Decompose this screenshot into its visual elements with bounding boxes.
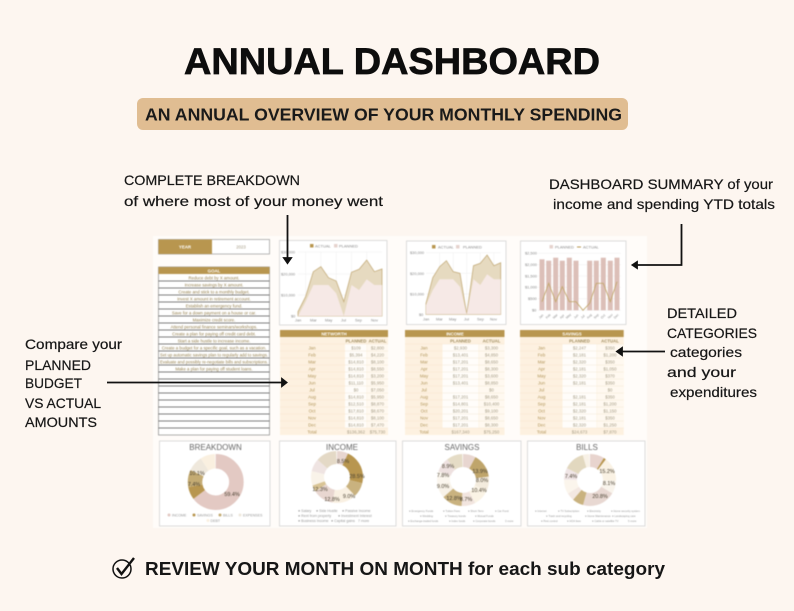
table: savings: Sep	[538, 402, 546, 406]
table: networth: $14,810	[348, 422, 364, 428]
chart: income area: $30,000	[410, 250, 425, 255]
table: income: Aug	[420, 394, 428, 400]
table: networth: $75,730	[370, 430, 386, 434]
table: savings: $2,320	[573, 360, 587, 364]
table: income: Dec	[420, 422, 429, 428]
donut: savings: ● Wedding	[420, 514, 433, 518]
table: savings: Mar	[538, 360, 546, 364]
annotation: dashboard summary: income and spending YTD totals	[553, 196, 775, 212]
table: income: $17,201	[453, 360, 469, 364]
table: income: PLANNED	[450, 339, 471, 344]
chart: net worth area: $30,000	[281, 250, 296, 254]
goal table: Create a budget for a specific goal, such as a vacation.	[162, 346, 266, 350]
donut: breakdown: EXPENSES	[243, 514, 263, 518]
table: income: $17,201	[453, 374, 469, 378]
year selector: YEAR	[179, 244, 192, 250]
table: savings: Jun	[538, 380, 546, 386]
annotation: detailed categories: expenditures	[670, 384, 757, 400]
table: networth: $11,110	[349, 380, 364, 386]
table: networth: $3,200	[371, 374, 385, 378]
donut: savings: 9.0%	[437, 484, 449, 490]
table: income: ACTUAL	[483, 339, 501, 344]
table: networth	[280, 330, 388, 435]
table: income: May	[420, 374, 429, 378]
donut: breakdown: 59.4%	[224, 492, 240, 498]
table: networth: $17,810	[348, 408, 364, 414]
donut: savings: 10.4%	[471, 488, 487, 494]
donut: bills: ● Electricity	[587, 509, 602, 513]
table: income: $75,250	[484, 430, 500, 434]
year selector	[158, 240, 270, 254]
chart: savings bars: ACTUAL	[583, 244, 600, 250]
annotation: compare planned vs actual	[25, 336, 122, 430]
table: savings: Jan	[538, 346, 546, 350]
table: networth: $136,362	[347, 430, 366, 434]
table: income: $8,300	[485, 366, 499, 372]
donut: income: 8.5%	[337, 459, 349, 465]
table: networth: NETWORTH	[321, 332, 347, 336]
table: savings: $370	[605, 374, 615, 378]
table: savings: $2,181	[573, 366, 587, 372]
donut: breakdown: DEBT	[210, 519, 221, 523]
chart: savings bars: $500	[528, 296, 537, 301]
table: savings: $1,250	[603, 422, 617, 428]
chart: income area	[406, 241, 506, 324]
arrow: to savings table	[617, 348, 665, 355]
chart: savings bars: PLANNED	[555, 244, 574, 250]
table: savings: $2,181	[573, 394, 587, 400]
table: savings	[520, 330, 624, 435]
footer statement: REVIEW YOUR MONTH ON MONTH for each sub category	[145, 559, 665, 579]
arrow: to planned table	[107, 379, 286, 386]
table: networth: $7,050	[371, 388, 385, 392]
donut: bills: 5 more	[628, 519, 637, 523]
table: savings: $24,673	[572, 430, 588, 434]
chart: savings bars: Jun	[573, 313, 580, 320]
table: savings: $2,181	[573, 352, 587, 358]
chart: income area: Jul	[464, 316, 469, 322]
subtitle banner: AN ANNUAL OVERVIEW OF YOUR MONTHLY SPENDING	[145, 104, 622, 124]
annotation: detailed categories: DETAILED	[667, 305, 737, 321]
chart: net worth area: $20,000	[281, 272, 296, 276]
year selector: 2023	[236, 244, 246, 250]
table: savings: $2,181	[573, 402, 587, 406]
annotation: compare planned vs actual: BUDGET	[25, 375, 82, 391]
table: income: Total	[419, 430, 429, 434]
table: networth: ACTUAL	[369, 339, 387, 344]
table: savings: $1,150	[603, 408, 617, 414]
donut: bills: ● TV Subscription	[558, 509, 580, 513]
goal table: Make a plan for paying off student loans.	[175, 366, 253, 372]
donut: savings: 8.0%	[476, 478, 488, 484]
donut: income: 12.3%	[312, 487, 328, 493]
goal table: GOAL	[208, 268, 221, 274]
donut: bills: ● Home Maintenance	[585, 514, 611, 518]
annotation: compare planned vs actual: Compare your	[25, 336, 122, 352]
chart: savings bars: Nov	[607, 313, 614, 320]
table: income: $9,100	[485, 408, 499, 414]
chart: savings bars: Sep	[593, 313, 600, 320]
table: income: $4,850	[485, 352, 499, 358]
icon: check circle	[113, 558, 134, 578]
chart: net worth area: Jan	[295, 318, 301, 322]
donut: bills: ● HOA fees	[567, 519, 582, 523]
chart: income area: $20,000	[410, 271, 425, 276]
donut: bills: ● Home security system	[611, 509, 641, 513]
table: income: Apr	[421, 366, 428, 372]
table: savings: $2,320	[573, 408, 587, 414]
annotation: detailed categories	[667, 305, 757, 400]
donut: bills: BILLS	[576, 443, 598, 452]
table: networth: $8,550	[371, 366, 385, 372]
table: savings: $7,870	[603, 430, 617, 434]
arrow: to area chart	[284, 215, 291, 263]
table: income: Oct	[421, 408, 428, 414]
table: networth: Feb	[308, 352, 316, 358]
donut: income: ● Rent from property	[298, 514, 331, 518]
table: networth: Jan	[308, 346, 316, 350]
table: income: $8,300	[485, 422, 499, 428]
chart: net worth area: Mar	[310, 318, 317, 322]
chart: savings bars: Dec	[613, 313, 620, 320]
chart: savings bars: Oct	[600, 313, 606, 320]
goal table: Reduce debt by X amount.	[189, 276, 239, 280]
annotation: detailed categories: categories	[670, 344, 742, 360]
chart: income area: Sep	[477, 316, 484, 322]
table: income: $13,401	[453, 380, 469, 386]
donut: income: 28.5%	[349, 474, 365, 480]
annotation: complete breakdown: COMPLETE BREAKDOWN	[124, 172, 300, 188]
donut: bills: 7.4%	[565, 474, 577, 480]
table: income: Mar	[420, 360, 428, 364]
chart: savings bars: Mar	[552, 312, 559, 320]
table: savings: May	[537, 374, 546, 378]
chart: savings bars	[520, 241, 626, 324]
table: income: $20,201	[453, 408, 469, 414]
donut: savings: ● Treasury bonds	[445, 514, 467, 518]
chart: net worth area: Sep	[355, 318, 362, 322]
chart: income area: Jan	[423, 316, 429, 322]
table: income: Jun	[420, 380, 428, 386]
table: income: $167,340	[452, 430, 470, 434]
donut: bills: ● Internet	[535, 509, 547, 513]
donut: income: ● Investment Interest	[338, 514, 372, 518]
table: income: $3,600	[485, 374, 499, 378]
chart: income area: ACTUAL	[438, 244, 455, 250]
goal table: Increase savings by X amount.	[185, 282, 243, 288]
donut: savings: ● Corporate bonds	[473, 519, 496, 523]
subtitle banner	[137, 98, 628, 130]
chart: savings bars: $2,000	[525, 262, 538, 267]
table: income	[405, 330, 504, 435]
table: networth: Mar	[308, 360, 316, 364]
donut: bills	[528, 441, 645, 526]
table: savings: $350	[605, 394, 615, 400]
donut: income: ● Salary	[298, 509, 312, 513]
goal table: Attend personal finance seminars/workshops.	[171, 324, 257, 330]
donut: bills: ● Landscaping care	[612, 514, 636, 518]
chart: net worth area: ACTUAL	[315, 244, 332, 248]
chart: savings bars: $0	[532, 308, 537, 313]
table: income: $13,401	[453, 352, 469, 358]
table: savings: $350	[605, 360, 615, 364]
chart: income area: $0	[419, 312, 424, 317]
table: income: $10,400	[484, 402, 500, 406]
table: income: $8,650	[485, 394, 499, 400]
table: savings: Total	[537, 430, 546, 434]
donut: savings: SAVINGS	[445, 443, 479, 452]
annotation: compare planned vs actual: PLANNED	[25, 357, 91, 373]
table: income: $3,300	[485, 346, 499, 350]
table: income: INCOME	[446, 332, 464, 336]
chart: savings bars: $1,500	[525, 273, 538, 278]
table: networth: $14,810	[348, 416, 364, 420]
chart: savings bars: Apr	[559, 313, 566, 320]
table: savings: Dec	[538, 422, 546, 428]
table: networth: $8,100	[371, 416, 385, 420]
table: income: $2,930	[454, 346, 468, 350]
table: networth: Apr	[309, 366, 316, 372]
table: income: Sep	[420, 402, 428, 406]
table: savings: Oct	[538, 408, 546, 414]
goal table: Create and stick to a monthly budget.	[178, 290, 250, 294]
table: networth: $14,810	[348, 360, 364, 364]
donut: savings: ● Short-Term	[468, 509, 484, 513]
table: savings: Apr	[538, 366, 545, 372]
donut: breakdown: 7.4%	[188, 482, 200, 488]
donut: breakdown: SAVINGS	[197, 514, 213, 518]
chart: savings bars: Feb	[545, 313, 552, 320]
table: networth: $109	[351, 346, 361, 350]
table: networth: $5,950	[371, 380, 385, 386]
chart: savings bars: May	[565, 312, 572, 320]
table: networth: Dec	[308, 422, 317, 428]
table: networth: $2,800	[371, 346, 385, 350]
chart: savings bars: Jan	[538, 313, 545, 320]
table: income: $17,201	[453, 422, 469, 428]
table: income: Jan	[420, 346, 428, 350]
table: networth: $5,394	[349, 352, 363, 358]
donut: breakdown: BREAKDOWN	[189, 443, 242, 452]
goal table: Save for a down payment on a house or car.	[172, 310, 256, 316]
donut: savings: 13.9%	[472, 469, 488, 475]
annotation: dashboard summary: DASHBOARD SUMMARY of your	[549, 176, 773, 192]
table: networth: Jul	[309, 388, 315, 392]
donut: breakdown	[160, 441, 270, 526]
table: savings: SAVINGS	[562, 332, 582, 336]
table: savings: $2,181	[573, 416, 587, 420]
table: savings: $2,320	[573, 422, 587, 428]
donut: income: ● Side Hustle	[316, 509, 338, 513]
donut: savings: 7.8%	[437, 473, 449, 479]
donut: breakdown: 10.1%	[189, 471, 205, 477]
annotation: detailed categories: CATEGORIES	[667, 325, 757, 341]
donut: savings: ● Emergency Funds	[409, 509, 434, 513]
chart: savings bars: $2,500	[525, 251, 538, 256]
chart: income area: Mar	[436, 316, 443, 322]
table: income: $17,201	[453, 416, 469, 420]
goal table: Start a side hustle to increase income.	[178, 338, 250, 344]
table: networth: $5,950	[371, 394, 385, 400]
table: networth: $0	[354, 388, 359, 392]
table: savings: $1,200	[603, 352, 617, 358]
annotation: compare planned vs actual: AMOUNTS	[25, 414, 97, 430]
chart: savings bars: Aug	[586, 313, 593, 320]
table: savings: PLANNED	[569, 339, 590, 344]
table: income: Feb	[420, 352, 428, 358]
donut: income: INCOME	[326, 443, 358, 452]
arrow: elbow to bar chart	[632, 224, 682, 268]
chart: income area: Nov	[490, 316, 497, 322]
table: income: $17,201	[453, 394, 469, 400]
table: networth: $14,810	[348, 374, 364, 378]
annotation: complete breakdown	[124, 172, 383, 209]
table: networth: $14,810	[348, 366, 364, 372]
table: income: $17,201	[453, 366, 469, 372]
goal table: Create a plan for paying off credit card debt.	[172, 332, 256, 336]
table: networth: Nov	[308, 416, 317, 420]
table: savings: $0	[608, 388, 613, 392]
dashboard screenshot panel	[153, 236, 647, 528]
donut: income: 7 more	[358, 519, 369, 523]
table: income: $0	[489, 388, 494, 392]
table: savings: Feb	[538, 352, 546, 358]
donut: bills: ● Cable or satellite TV	[592, 519, 619, 523]
table: income: $8,850	[485, 380, 499, 386]
donut: income: ● Capital gains	[331, 519, 355, 523]
donut: income: ● Business Income	[298, 519, 329, 523]
table: savings: $350	[605, 416, 615, 420]
table: networth: Oct	[309, 408, 316, 414]
table: networth: PLANNED	[346, 339, 366, 344]
table: networth: $8,670	[371, 408, 385, 414]
table: savings: $350	[605, 346, 615, 350]
chart: income area: May	[449, 316, 456, 322]
table: savings: $350	[605, 380, 615, 386]
donut: savings: 3 more	[505, 519, 514, 523]
donut: savings: 8.9%	[442, 464, 454, 470]
donut: savings: ● Mutual Funds	[475, 514, 494, 518]
chart: net worth area: Nov	[371, 318, 378, 322]
goal table: Evaluate and possibly re-negotiate bills and subscriptions.	[160, 360, 268, 364]
table: networth: $14,810	[348, 394, 364, 400]
chart: savings bars: $1,000	[525, 285, 538, 290]
table: savings: $1,050	[603, 366, 617, 372]
donut: savings: 8.7%	[460, 497, 472, 503]
donut: savings: ● Car Fund	[495, 509, 509, 513]
table: savings: $2,247	[573, 346, 587, 350]
donut: savings: ● Index funds	[449, 519, 466, 523]
chart: income area: PLANNED	[463, 244, 482, 250]
goal table	[158, 267, 270, 435]
table: networth: Aug	[308, 394, 316, 400]
donut: savings: ● Exchange-traded funds	[408, 519, 439, 523]
table: networth: $8,100	[371, 360, 385, 364]
donut: bills: ● Pest control	[541, 519, 558, 523]
annotation: dashboard summary	[549, 176, 775, 212]
table: networth: $12,510	[348, 402, 364, 406]
table: income: $8,650	[485, 416, 499, 420]
table: networth: Jun	[308, 380, 316, 386]
table: income: $8,650	[485, 360, 499, 364]
table: networth: $4,220	[371, 352, 385, 358]
table: savings: Nov	[538, 416, 546, 420]
chart: net worth area: PLANNED	[339, 244, 358, 248]
table: savings: ACTUAL	[601, 339, 619, 344]
donut: bills: 8.1%	[603, 481, 615, 487]
chart: net worth area: Jul	[341, 318, 346, 322]
table: savings: $1,200	[603, 402, 617, 406]
donut: savings	[402, 441, 521, 526]
table: networth: $8,870	[371, 402, 385, 406]
table: income: Nov	[420, 416, 429, 420]
goal table: Establish an emergency fund.	[186, 304, 242, 308]
table: savings: Aug	[538, 394, 546, 400]
table: income: $14,801	[453, 402, 469, 406]
table: savings: $2,181	[573, 380, 587, 386]
donut: income: ● Passive Income	[342, 509, 371, 513]
donut: bills: 15.2%	[599, 469, 615, 475]
chart: net worth area	[280, 240, 387, 325]
annotation: detailed categories: and your	[667, 364, 736, 380]
donut: savings: ● Tuition Fees	[443, 509, 461, 513]
chart: net worth area: $0	[291, 314, 296, 318]
title: ANNUAL DASHBOARD	[184, 41, 600, 82]
annotation: compare planned vs actual: VS ACTUAL	[25, 395, 101, 411]
chart: savings bars: Jul	[580, 314, 586, 320]
table: income: Jul	[421, 388, 427, 392]
table: savings: $2,320	[573, 374, 587, 378]
table: networth: $7,470	[371, 422, 385, 428]
donut: bills: ● Trash and recycling	[546, 514, 572, 518]
annotation: complete breakdown: of where most of your money went	[124, 193, 383, 209]
donut: income: 9.0%	[343, 494, 355, 500]
donut: bills: 20.8%	[592, 494, 608, 500]
donut: savings: 12.8%	[446, 496, 462, 502]
chart: income area: $10,000	[410, 292, 425, 296]
goal table: Set up automatic savings plan to regularly add to savings.	[160, 352, 268, 358]
table: networth: Sep	[308, 402, 316, 406]
goal table: Maximize credit score.	[193, 318, 235, 322]
table: networth: May	[308, 374, 317, 378]
table: savings: Jul	[539, 388, 544, 392]
donut: breakdown: INCOME	[172, 514, 187, 518]
chart: net worth area: $10,000	[281, 292, 296, 298]
donut: breakdown: BILLS	[223, 514, 233, 518]
table: networth: Total	[307, 430, 317, 434]
chart: net worth area: May	[325, 318, 332, 322]
donut: income	[280, 441, 396, 526]
donut: income: 12.8%	[324, 497, 340, 503]
goal table: Invest X amount in retirement account.	[177, 296, 251, 302]
